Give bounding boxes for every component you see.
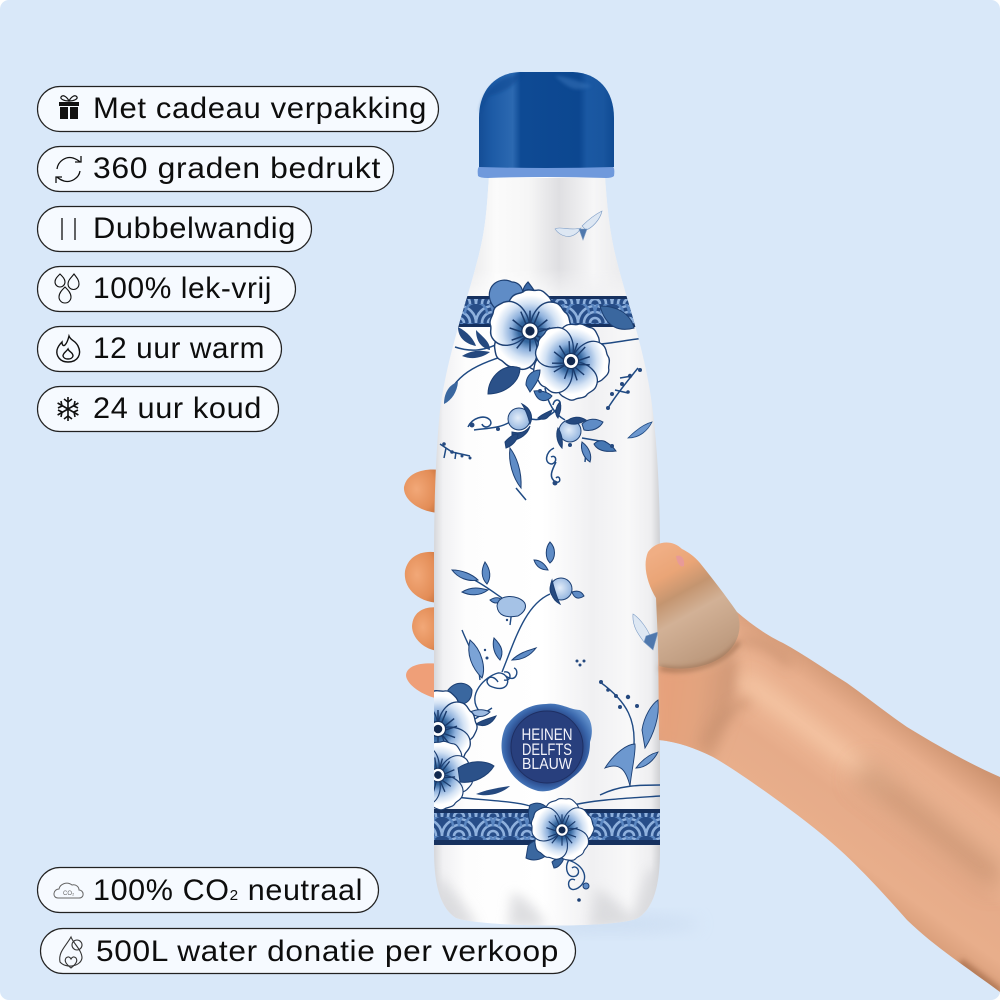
forearm	[658, 612, 1000, 992]
top band	[458, 296, 636, 327]
base dents	[438, 870, 655, 926]
bottom sprays	[461, 580, 660, 890]
brand seal: HEINEN	[522, 726, 572, 744]
small flower top	[489, 280, 536, 312]
palm	[656, 650, 738, 760]
thumb crease	[660, 642, 739, 670]
label: 24 uur koud	[93, 392, 262, 425]
pill: gift wrap	[38, 86, 438, 132]
brand seal: BLAUW	[522, 756, 573, 773]
bottle	[434, 72, 660, 926]
bottle body	[434, 176, 660, 926]
second flower	[516, 310, 624, 416]
label: 360 graden bedrukt	[93, 152, 381, 185]
hand: thumb and arm	[646, 543, 1000, 992]
pill: double wall	[38, 206, 312, 252]
label: 100% lek-vrij	[93, 272, 272, 305]
thumb nail	[676, 556, 684, 566]
pill: leak free	[38, 266, 296, 312]
middle floral cluster	[505, 391, 616, 488]
bottom florals	[434, 541, 659, 902]
thumb	[646, 543, 740, 669]
finger 1	[404, 470, 440, 513]
label: 12 uur warm	[93, 332, 265, 365]
pill: cold	[38, 386, 278, 432]
finger 2	[405, 552, 440, 603]
small dark flower left	[447, 683, 472, 704]
bottom band	[430, 809, 665, 845]
wrist edge shadow at bottom-right	[960, 962, 1000, 992]
icon: snowflake	[58, 397, 78, 421]
pill: warm	[38, 326, 282, 372]
large flower	[484, 290, 576, 377]
top sprays	[440, 338, 645, 500]
arm highlight	[754, 686, 850, 760]
icon: cloud	[54, 883, 83, 898]
label: 500L water donatie per verkoop	[96, 935, 559, 968]
icon: rotate arrows	[56, 156, 81, 183]
insect	[633, 614, 658, 650]
icon: double wall lines	[62, 218, 75, 240]
arm shadow	[860, 770, 1000, 880]
dark leaves	[488, 367, 520, 394]
pill: water donation	[40, 928, 576, 974]
hand: fingers behind bottle	[404, 470, 443, 699]
right plant	[605, 700, 658, 786]
pill: CO2 neutral: CO₂	[63, 891, 75, 897]
neck shading	[470, 178, 622, 296]
label: 100% CO2 neutraal	[93, 874, 363, 907]
right leaf on band	[600, 306, 634, 329]
icon: drops	[55, 274, 79, 303]
label: Met cadeau verpakking	[93, 92, 427, 125]
wrist shading	[729, 636, 788, 716]
pill: 360 print	[38, 146, 394, 192]
icon: water drop with heart	[60, 937, 82, 968]
brand seal	[502, 704, 592, 791]
label: Dubbelwandig	[93, 212, 296, 245]
dark leaf	[458, 762, 494, 782]
bottom flower	[526, 803, 564, 868]
brand seal: DELFTS	[522, 741, 572, 759]
finger 4	[406, 663, 440, 699]
icon: flame	[57, 336, 80, 362]
pill: CO2 neutral	[38, 868, 378, 912]
left flowers clipped to bottle	[434, 690, 478, 810]
top florals	[442, 211, 652, 488]
finger 3	[412, 607, 443, 651]
butterfly	[555, 211, 602, 240]
bottle cap	[479, 72, 614, 168]
bottle cap ring	[478, 167, 614, 178]
bottle shadow on floor	[520, 915, 700, 933]
icon: gift	[59, 96, 79, 119]
upper sprigs and buds	[452, 542, 584, 726]
